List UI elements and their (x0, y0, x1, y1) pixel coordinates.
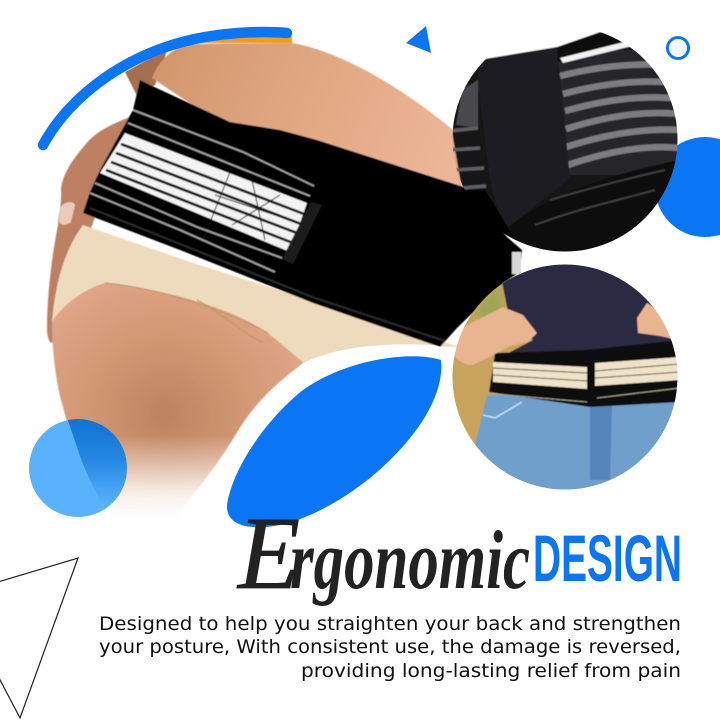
band lines (493, 364, 680, 402)
velcro flap edge (282, 202, 322, 264)
top black straps (557, 33, 620, 62)
outlined triangle (0, 558, 78, 718)
heading script word: rgonomic (290, 514, 530, 607)
description text: your posture, With consistent use, the damage is reversed, (99, 636, 681, 658)
jeans fly seam (590, 405, 612, 480)
blue circle right (655, 137, 720, 237)
upper leg (52, 283, 304, 525)
glossy highlight (456, 80, 478, 128)
rear arm (125, 48, 168, 96)
white support panel (100, 133, 307, 252)
panel cross stitching (203, 172, 296, 240)
jeans (470, 395, 680, 490)
top white slit (560, 41, 632, 63)
panel dark stripes (106, 144, 304, 243)
fingernail (59, 202, 75, 225)
hand on hip (47, 116, 132, 343)
leg seen through circle (68, 419, 127, 510)
lower black strap (503, 160, 680, 255)
elastic band lines (90, 110, 314, 272)
right mesh bands (555, 50, 680, 175)
black belt (489, 340, 680, 407)
circle inset: person wearing belt (450, 258, 680, 492)
white halo behind blue blob (215, 344, 458, 532)
belt body (83, 80, 522, 347)
belt side strip (512, 252, 521, 274)
blue blob (227, 356, 441, 527)
skin corner (452, 132, 462, 184)
orange band (183, 36, 292, 43)
left mesh bands (450, 128, 486, 188)
jeans pocket (483, 402, 522, 418)
description text: Designed to help you straighten your back and strengthen (99, 613, 681, 635)
navy shirt (502, 264, 672, 354)
main photo: belt worn on hip (47, 36, 522, 525)
main belt overlap (465, 190, 516, 240)
lower strap highlights (535, 170, 665, 225)
underwear (52, 225, 460, 366)
heading (236, 496, 682, 611)
icon: blue ring (668, 38, 688, 58)
torso skin (152, 43, 480, 200)
heading script capital: E (236, 496, 300, 611)
velcro flap (478, 47, 570, 232)
circle inset: belt close-up (452, 32, 678, 252)
icon: blue triangle (406, 26, 431, 53)
light blue circle (29, 419, 127, 517)
decorative blue arc (43, 32, 287, 145)
underwear seams (105, 283, 268, 342)
right hand (636, 302, 671, 340)
left hand (453, 307, 537, 365)
green foliage (475, 285, 502, 325)
cream band right (595, 357, 680, 386)
description text: providing long-lasting relief from pain (301, 660, 681, 682)
description text (99, 613, 681, 682)
cream band left (493, 362, 587, 389)
belt edge stitching (90, 208, 445, 341)
white photo background (485, 26, 602, 60)
